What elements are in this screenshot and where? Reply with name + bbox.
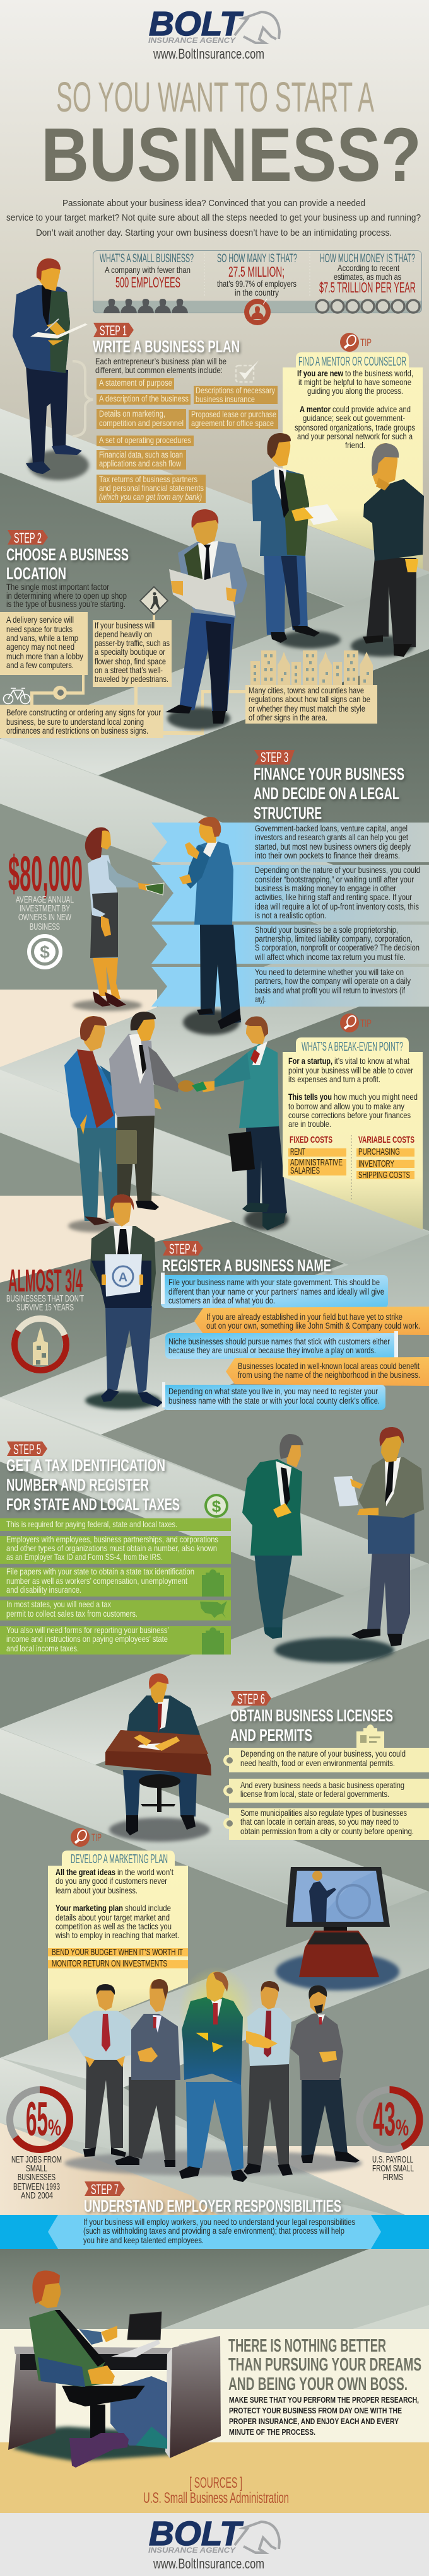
icon: green dollar: $ xyxy=(212,1497,221,1516)
step 5 heading xyxy=(6,1456,180,1514)
brace xyxy=(73,361,93,436)
stat: almost 3/4: SURVIVE 15 YEARS xyxy=(16,1302,74,1313)
icon: pie with person xyxy=(244,299,271,325)
figure: man at desk with laptop xyxy=(8,2270,221,2468)
figure: man with newspaper xyxy=(165,509,247,730)
step 2 heading: LOCATION xyxy=(6,564,66,583)
figure group: five business people xyxy=(64,1967,362,2182)
tip text: to borrow and allow you to make any xyxy=(288,1102,404,1111)
bubble 2 xyxy=(194,1307,429,1335)
figure: man signing papers at desk xyxy=(105,1673,211,1842)
sources: [ SOURCES ] xyxy=(189,2475,242,2492)
tip text: do you any good if customers never xyxy=(56,1876,167,1886)
figure: man in teal jacket with briefcase xyxy=(192,1016,288,1230)
icons: five people xyxy=(103,299,188,313)
bar 4 xyxy=(0,1600,231,1620)
person 3 xyxy=(179,1972,247,2182)
bubble 3 xyxy=(165,1331,398,1359)
box 2: license from local, state or federal governments. xyxy=(240,1789,389,1799)
figure: man in red shirt xyxy=(64,1016,162,1232)
stat: what's a small business: WHAT’S A SMALL BUSINESS? xyxy=(100,252,194,265)
stat: almost 3/4 xyxy=(6,1263,84,1313)
intro text xyxy=(6,198,421,238)
sources xyxy=(143,2475,289,2507)
bar 2: Employers with employees, business partnerships, and corporations xyxy=(6,1535,218,1544)
tip text: it’s vital to know at what xyxy=(334,1056,409,1066)
tip text: friend. xyxy=(345,441,365,450)
ribbon 1 xyxy=(151,823,429,862)
background: lower road, closing panels and footer xyxy=(0,2249,429,2576)
tip panel: find a mentor xyxy=(283,333,423,569)
step 4 badge xyxy=(163,1241,203,1257)
step 3 heading: STRUCTURE xyxy=(254,804,322,823)
label: net jobs: BETWEEN 1993 xyxy=(13,2181,60,2192)
step 1 intro: Each entrepreneur’s business plan will be xyxy=(95,357,226,366)
logo: Bolt Insurance Agency (footer): BOLT xyxy=(149,2515,244,2553)
stat: $80,000: AVERAGE ANNUAL xyxy=(16,894,74,905)
tip text: in the world won’t xyxy=(117,1868,173,1877)
box 1 xyxy=(223,1748,429,1772)
stat: what's a small business: 500 EMPLOYEES xyxy=(115,274,180,291)
stat: how many: in the country xyxy=(235,288,279,297)
tip text: If you are new xyxy=(297,369,343,378)
bubbles: business name advice xyxy=(161,1273,429,1410)
box: passer-by traffic: If your business will xyxy=(95,621,155,630)
box: delivery service: A delivery service will xyxy=(6,615,74,625)
step 2 intro: is the type of business you’re starting. xyxy=(6,599,126,609)
step 5 heading: FOR STATE AND LOCAL TAXES xyxy=(6,1495,180,1514)
box: marketing: competition and personnel xyxy=(99,419,184,428)
bar 3: and disability insurance. xyxy=(6,1585,81,1595)
variable costs list: PURCHASING xyxy=(358,1147,400,1157)
box: sign regulations: Many cities, towns and counties have xyxy=(249,686,364,695)
business plan element boxes xyxy=(97,378,278,503)
bar 5: income and instructions on paying employees’ state xyxy=(6,1634,168,1644)
stat: how much money: According to recent xyxy=(338,263,399,273)
box: tax returns: (which you can get from any bank) xyxy=(99,492,202,502)
title xyxy=(41,74,421,197)
step 4 heading: REGISTER A BUSINESS NAME xyxy=(162,1256,331,1275)
tab heading: DEVELOP A MARKETING PLAN xyxy=(71,1852,168,1866)
logo: Bolt Insurance Agency (header): INSURANCE AGENCY xyxy=(148,36,236,45)
bar 5 xyxy=(0,1626,231,1655)
box: delivery service: agency may not need xyxy=(6,642,74,652)
figure: thinking man xyxy=(351,443,424,657)
tip text: its expenses and turn a profit. xyxy=(288,1075,380,1084)
ribbons: financing text xyxy=(151,823,429,1007)
box 2 xyxy=(223,1779,429,1803)
box xyxy=(283,1052,423,1230)
figure: mentor with paper xyxy=(252,433,341,649)
label: net jobs xyxy=(11,2154,62,2201)
stat: what's a small business: A company with fewer than xyxy=(105,265,191,275)
figure: man with blue jacket xyxy=(179,817,241,1035)
intro text: Don’t wait another day. Starting your own business doesn’t have to be an intimidating process. xyxy=(36,228,392,238)
label: net jobs: NET JOBS FROM xyxy=(11,2154,62,2165)
tip text: learn about your business. xyxy=(56,1886,138,1895)
variable costs list: INVENTORY xyxy=(358,1159,394,1169)
orange bars: MONITOR RETURN ON INVESTMENTS xyxy=(52,1959,167,1969)
icon: pedestrian sign xyxy=(140,587,168,615)
fixed costs list: FIXED COSTS xyxy=(290,1135,332,1145)
figure: man with document xyxy=(334,1427,424,1646)
box: tax returns: Tax returns of business partners xyxy=(99,475,197,484)
ribbon 4: You need to determine whether you will take on xyxy=(255,967,404,977)
box: sign regulations: of other signs in the area. xyxy=(249,713,327,722)
logo: Bolt Insurance Agency (footer): INSURANCE AGENCY xyxy=(148,2546,236,2555)
step 3 heading xyxy=(254,765,404,823)
blue bar: employer text: you hire and keep talented employees. xyxy=(83,2236,204,2245)
step 4 badge: STEP 4 xyxy=(169,1241,197,1257)
icon: light bulb xyxy=(71,1828,90,1847)
step 6 badge: STEP 6 xyxy=(237,1691,265,1707)
box: zoning: ordinances and restrictions on business signs. xyxy=(6,726,148,736)
bar 5: and local income taxes. xyxy=(6,1644,79,1653)
tip text: should include xyxy=(125,1903,171,1913)
variable costs list xyxy=(356,1135,414,1181)
green bars: tax info xyxy=(0,1518,231,1655)
blue bar: employer text: (such as withholding taxes and providing a safe environment); that process will help xyxy=(83,2226,344,2236)
icon: license clipboard xyxy=(356,1724,384,1748)
tip label: TIP xyxy=(360,1017,372,1029)
tip label: TIP xyxy=(360,337,372,349)
bar 2: as an Employer Tax ID and Form SS-4, from the IRS. xyxy=(6,1552,163,1562)
icon: bicycle xyxy=(4,688,30,703)
figure: man holding logo sign: A xyxy=(119,1271,127,1285)
box: delivery service xyxy=(0,612,88,675)
box: operating procedures: A set of operating procedures xyxy=(99,436,191,445)
tip text: This tells you xyxy=(288,1092,332,1102)
step 2 intro: The single most important factor xyxy=(6,582,109,592)
bubble 4 xyxy=(226,1357,429,1386)
stat: $80,000: INVESTMENT BY xyxy=(20,903,70,914)
tab xyxy=(296,352,409,367)
box xyxy=(48,1866,188,2040)
connector node xyxy=(53,686,67,700)
bar 3 xyxy=(0,1567,231,1597)
illustration: monitor on pedestal xyxy=(276,1867,399,1990)
ribbon 2 xyxy=(151,865,429,921)
blue bar: employer text: If your business will employ workers, you need to understand your legal responsibilities xyxy=(83,2217,355,2227)
icon: dollar coin xyxy=(29,936,61,967)
fixed costs list: SALARIES xyxy=(290,1166,320,1176)
text: $80,000 xyxy=(8,845,83,901)
step 1 intro: different, but common elements include: xyxy=(95,366,223,375)
step 5 badge xyxy=(7,1441,47,1457)
bar 2 xyxy=(0,1535,231,1564)
stat: $80,000 xyxy=(8,845,83,932)
label: U.S. payroll xyxy=(372,2154,414,2183)
person 1 xyxy=(68,1984,134,2157)
text: ALMOST 3/4 xyxy=(8,1263,83,1298)
box: passer-by traffic: depend heavily on xyxy=(95,630,152,639)
stat: how many: SO HOW MANY IS THAT? xyxy=(217,252,297,265)
step 6 heading xyxy=(230,1706,393,1745)
intro text: Passionate about your business idea? Convinced that you can provide a needed xyxy=(62,198,365,209)
sources: U.S. Small Business Administration xyxy=(143,2490,289,2507)
tip panel: break-even point xyxy=(283,1014,423,1230)
figure: man in green suit xyxy=(242,1434,394,1663)
tip text: guiding you along the process. xyxy=(307,386,403,396)
stat: almost 3/4: BUSINESSES THAT DON’T xyxy=(6,1293,84,1304)
step 1 heading: WRITE A BUSINESS PLAN xyxy=(93,337,240,356)
ribbon 4 xyxy=(151,967,429,1007)
bar 2: and other types of organizations must obtain a number, also known xyxy=(6,1544,217,1553)
tip panel: marketing plan xyxy=(48,1828,188,2040)
footer website url: www.BoltInsurance.com xyxy=(153,2556,264,2572)
orange bars xyxy=(48,1948,188,1969)
closing text xyxy=(229,2395,419,2437)
ribbon 4: any). xyxy=(255,995,266,1004)
bubble 1: customers an idea of what you do. xyxy=(168,1296,275,1305)
ribbon 2: is not a realistic option. xyxy=(255,911,326,920)
bubble 5: Depending on what state you live in, you may need to register your xyxy=(168,1387,378,1396)
bar 3: File papers with your state to obtain a state tax identification xyxy=(6,1567,194,1576)
gauge: 65%: 65 xyxy=(26,2093,48,2146)
box: zoning xyxy=(0,705,163,738)
step 6 heading: AND PERMITS xyxy=(230,1726,312,1745)
box: financial data xyxy=(97,450,186,470)
ribbon 3 xyxy=(151,925,429,964)
person 5 xyxy=(290,1985,360,2163)
icons: seven coins xyxy=(316,300,420,313)
tab xyxy=(296,1037,409,1052)
box: insurance: business insurance xyxy=(196,395,255,404)
tip text: competition as well as the tactics you xyxy=(56,1922,172,1931)
box: passer-by traffic: a specialty boutique or xyxy=(95,647,165,657)
icon: city skyline xyxy=(250,650,373,685)
logo: Bolt Insurance Agency (footer) xyxy=(148,2515,279,2555)
figure: man in gray suit xyxy=(109,1012,194,1210)
tip text: A mentor xyxy=(300,405,331,414)
panel: small business stats xyxy=(93,251,421,325)
boxes: licenses and permits xyxy=(223,1748,429,1840)
step 2 intro xyxy=(6,582,127,609)
box xyxy=(283,367,423,569)
box: insurance: Descriptions of necessary xyxy=(196,386,275,395)
step 3 badge xyxy=(254,749,295,765)
box: statement of purpose: A statement of purpose xyxy=(99,378,172,388)
fixed costs list: ADMINISTRATIVE xyxy=(290,1158,343,1168)
box: passer-by traffic xyxy=(93,620,172,687)
box: marketing xyxy=(97,409,186,429)
step 5 heading: NUMBER AND REGISTER xyxy=(6,1476,149,1494)
step 5 badge: STEP 5 xyxy=(13,1441,41,1457)
bubble 3: because they are unusual or because they involve a play on words. xyxy=(168,1346,376,1355)
step 2 heading: CHOOSE A BUSINESS xyxy=(6,545,129,564)
step 2 intro: in determining where to open up shop xyxy=(6,591,127,601)
bubble 5: business name with the state or with your local county clerk’s office. xyxy=(168,1396,380,1406)
icon: green dollar xyxy=(204,1494,228,1518)
tip text: guidance; seek out government- xyxy=(303,413,405,423)
step 1 intro xyxy=(95,357,226,375)
stat: $80,000: BUSINESS xyxy=(30,921,60,932)
bar 5: You also will need forms for reporting your business’ xyxy=(6,1626,169,1635)
step 3 badge: STEP 3 xyxy=(261,749,288,765)
step 1 badge: STEP 1 xyxy=(100,323,127,338)
bar 4: In most states, you will need a tax xyxy=(6,1600,111,1609)
step 2 badge xyxy=(8,530,48,546)
box: marketing: Details on marketing, xyxy=(99,409,165,419)
person 4 xyxy=(244,1981,293,2176)
fixed costs list: RENT xyxy=(290,1147,305,1157)
figure: woman handing money xyxy=(73,827,164,1011)
tip text: details about your target market and xyxy=(56,1913,170,1922)
icon: clipboard xyxy=(202,1627,224,1655)
box: insurance xyxy=(194,386,278,404)
box: tax returns xyxy=(97,475,206,503)
closing heading xyxy=(228,2336,421,2394)
bar 1 xyxy=(0,1518,231,1531)
bubble 1: different than your name or your partners’ names and ideally will give xyxy=(168,1287,384,1297)
tab xyxy=(62,1851,175,1866)
tip text xyxy=(55,1868,179,1940)
step 2 heading xyxy=(6,545,129,583)
bubble 5 xyxy=(162,1382,385,1410)
box: description of business: A description of the business xyxy=(99,394,189,403)
ribbon 3: Should your business be a sole proprietorship, xyxy=(255,925,398,935)
ribbon 2: business is making money to engage in other xyxy=(255,884,396,893)
stat: how many xyxy=(217,252,297,297)
tip text: Your marketing plan xyxy=(56,1903,123,1913)
bubble 1 xyxy=(161,1273,388,1308)
label: U.S. payroll: FIRMS xyxy=(383,2172,403,2183)
tip text: All the great ideas xyxy=(56,1868,115,1877)
box: delivery service: need space for trucks xyxy=(6,625,73,634)
step 7 badge: STEP 7 xyxy=(91,2181,119,2197)
stat: how many: 27.5 MILLION; xyxy=(228,263,285,280)
icon: light bulb xyxy=(340,333,359,352)
gauge: 43%: % xyxy=(396,2115,409,2140)
box: zoning: business, be sure to understand local zoning xyxy=(6,717,144,727)
icon: ring with building xyxy=(7,1311,74,1378)
tip text: are in trouble. xyxy=(288,1119,331,1129)
label: net jobs: AND 2004 xyxy=(21,2190,53,2201)
box: sign regulations: or whether they must match the style xyxy=(249,704,365,713)
blue bar: employer text xyxy=(0,2215,429,2249)
logo: Bolt Insurance Agency (header) xyxy=(148,5,279,45)
tip text: wish to employ in reaching that market. xyxy=(55,1931,179,1940)
box: lease: Proposed lease or purchase xyxy=(191,410,276,419)
box: financial data: applications and cash flow xyxy=(99,459,181,468)
box: lease: agreement for office space xyxy=(191,419,274,428)
bar 3: number as well as workers’ compensation, unemployment xyxy=(6,1576,187,1586)
tip text: could provide advice and xyxy=(332,405,411,414)
stat: what's a small business xyxy=(100,252,194,291)
stat: how much money xyxy=(319,252,416,296)
icon: checkbox xyxy=(236,361,259,382)
label: net jobs: BUSINESSES xyxy=(18,2172,56,2183)
tip text xyxy=(288,1056,418,1129)
logo: Bolt Insurance Agency (header): BOLT xyxy=(149,5,244,43)
ribbon 1: into their own pockets to finance their dreams. xyxy=(255,851,400,860)
gauge: 65%: % xyxy=(48,2115,61,2140)
box: delivery service: and a few computers. xyxy=(6,661,74,670)
tip text: to the business world, xyxy=(345,369,413,378)
box: passer-by traffic: passer-by traffic, such as xyxy=(95,638,170,648)
box: tax returns: and personal financial statements xyxy=(99,483,204,493)
stat: $80,000: OWNERS IN NEW xyxy=(18,912,72,923)
figure: man holding logo sign xyxy=(85,1194,163,1409)
person 2 xyxy=(115,1979,180,2167)
icon: US map xyxy=(200,1601,227,1618)
box: lease xyxy=(189,410,278,429)
box: delivery service: much more than a lobby xyxy=(6,652,83,661)
tip label: TIP xyxy=(91,1832,102,1844)
orange bars: BEND YOUR BUDGET WHEN IT’S WORTH IT xyxy=(52,1948,183,1958)
box: sign regulations xyxy=(245,685,377,724)
tip text xyxy=(295,369,415,450)
tip text: it might be helpful to have someone xyxy=(298,378,411,387)
stat: how many: that’s 99.7% of employers xyxy=(217,279,297,289)
figure: man writing in notebook xyxy=(13,258,89,480)
icon: dollar coin: $ xyxy=(40,942,50,962)
step 7 badge xyxy=(85,2181,125,2197)
bar 1: This is required for paying federal, state and local taxes. xyxy=(6,1520,177,1529)
tip text: For a startup, xyxy=(288,1056,332,1066)
box: passer-by traffic: on a street that’s well- xyxy=(95,666,163,675)
label: net jobs: SMALL xyxy=(26,2163,47,2174)
box: passer-by traffic: flower shop, find space xyxy=(95,657,166,666)
box: zoning: Before constructing or ordering any signs for your xyxy=(6,708,161,717)
fixed costs list xyxy=(288,1135,346,1176)
bubble 1: File your business name with your state government. This should be xyxy=(168,1278,380,1287)
box 3 xyxy=(223,1808,429,1840)
gauge: 43%: 43 xyxy=(373,2093,396,2146)
box: passer-by traffic: traveled by pedestrians. xyxy=(95,674,168,684)
icon: clipboard xyxy=(202,1569,224,1597)
box: financial data: Financial data, such as loan xyxy=(99,450,183,459)
box 1: need health, food or even environmental permits. xyxy=(240,1759,395,1768)
step 2 badge: STEP 2 xyxy=(14,530,42,546)
step 1 badge xyxy=(93,323,134,338)
icon: light bulb xyxy=(340,1014,359,1032)
closing text: MINUTE OF THE PROCESS. xyxy=(229,2427,315,2437)
website url: www.BoltInsurance.com xyxy=(153,46,264,62)
box: sign regulations: regulations about how tall signs can be xyxy=(249,695,370,704)
gauge: 43% xyxy=(360,2090,420,2149)
step 5 heading: GET A TAX IDENTIFICATION xyxy=(6,1456,165,1475)
step 6 badge xyxy=(231,1691,271,1707)
stat: how much money: estimates, as much as xyxy=(334,272,401,282)
box: delivery service: and vans, while a temp xyxy=(6,633,78,643)
bar 4: permit to collect sales tax from customers. xyxy=(6,1609,138,1619)
connectors xyxy=(30,615,245,735)
gauge: 65% xyxy=(10,2090,69,2149)
